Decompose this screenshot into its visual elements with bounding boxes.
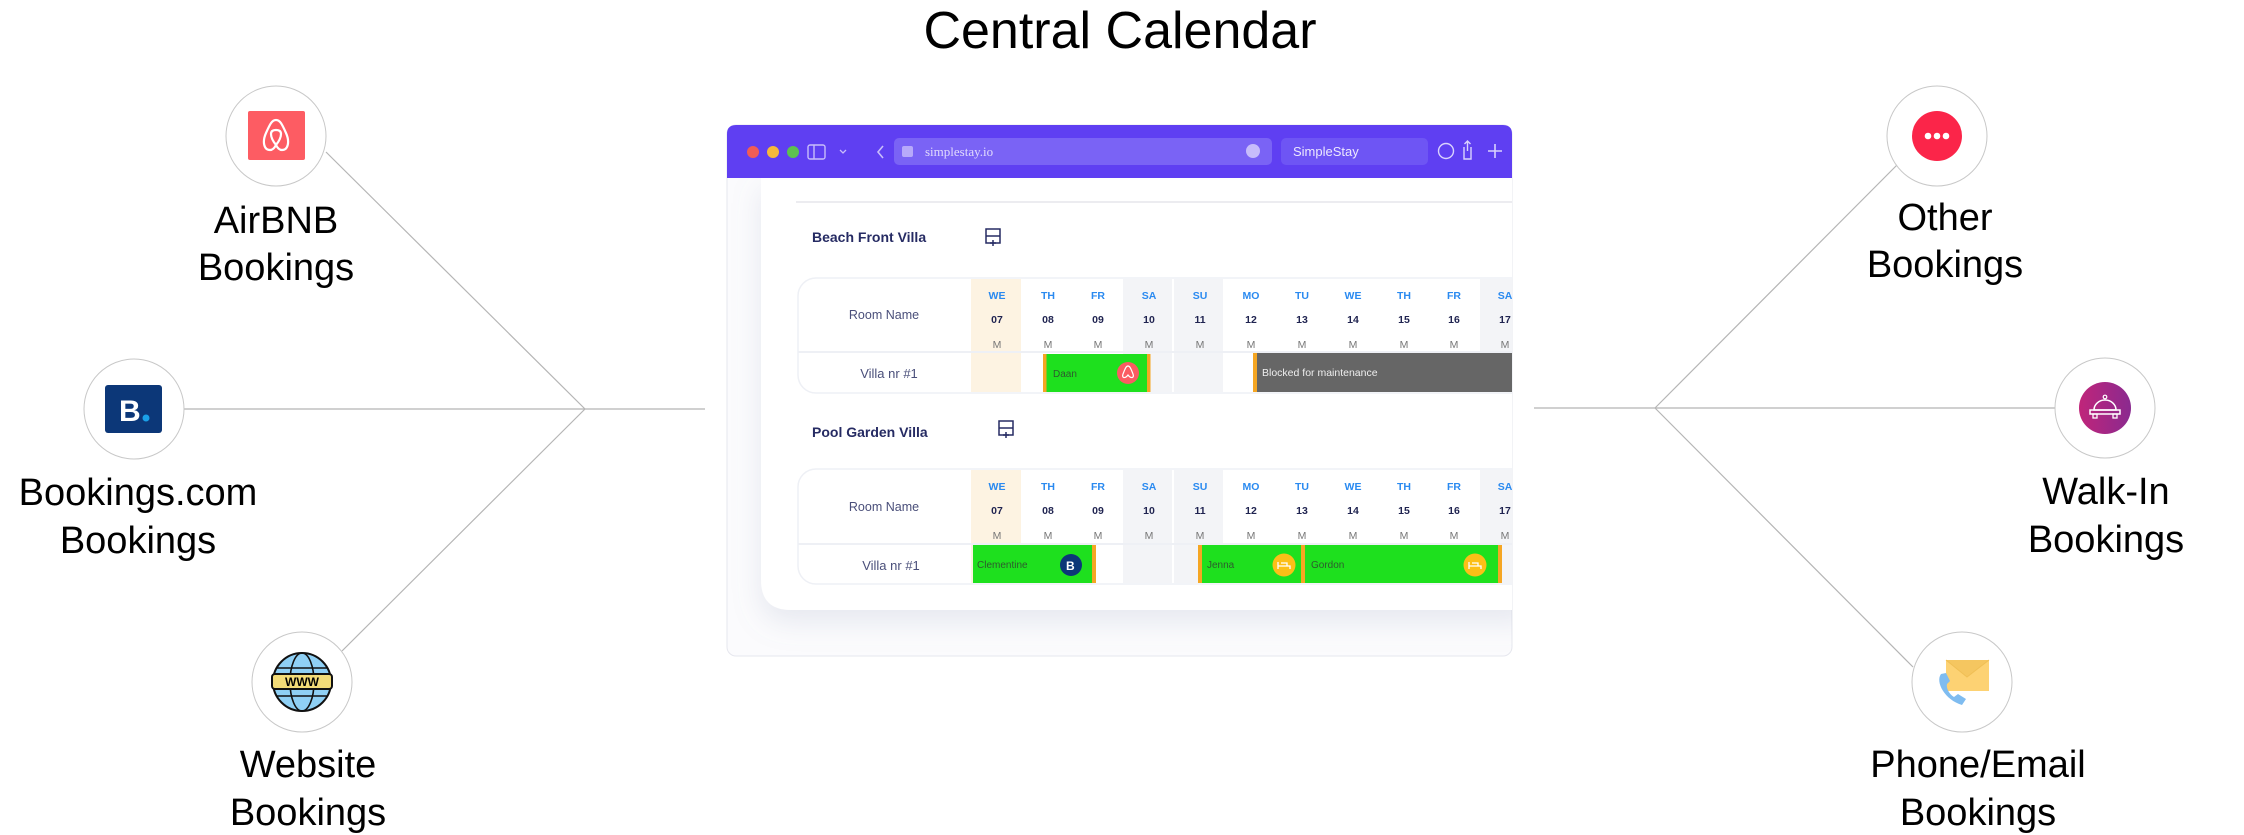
table 2: TH: [1041, 481, 1055, 493]
table 1: 09: [1092, 314, 1104, 326]
table 2: SU: [1193, 481, 1207, 493]
inner card: [761, 178, 1530, 610]
table 2: M: [1247, 530, 1255, 542]
table 1: M: [1501, 339, 1509, 351]
table 1: TU: [1295, 290, 1309, 302]
node: Walk-In: [2028, 358, 2184, 561]
table 1: MO: [1243, 290, 1259, 302]
table 2: M: [1298, 530, 1306, 542]
table 2: Villa nr #1: [862, 558, 920, 573]
booking bar: Gordon: [1301, 545, 1502, 583]
table 1: FR: [1447, 290, 1461, 302]
booking bar: Clementine: Clementine: [977, 560, 1028, 571]
booking bar: Jenna: Jenna: [1207, 560, 1235, 571]
table 1: FR: [1091, 290, 1105, 302]
table 2: WE: [1345, 481, 1361, 493]
node: AirBNB: [198, 86, 354, 289]
node: Booking.com: [19, 359, 257, 562]
node: Booking.com: Bookings.com: [19, 472, 257, 514]
table 1: WE: [1345, 290, 1361, 302]
table 1: 14: [1347, 314, 1359, 326]
table 2: WE: [989, 481, 1005, 493]
node: Phone/Email: Phone/Email: [1870, 744, 2086, 786]
table 1: TH: [1041, 290, 1055, 302]
table 1: WE: [989, 290, 1005, 302]
node: Other: Other: [1897, 197, 1993, 239]
table 1: Room Name: [849, 308, 919, 322]
icon: phone email: [1939, 660, 1989, 705]
booking bar: Clementine: B: [1066, 559, 1075, 573]
table 1: [798, 278, 1538, 393]
node: Phone/Email: Bookings: [1900, 792, 2056, 834]
connector lines right: [1534, 165, 2055, 667]
table 1: 12: [1245, 314, 1257, 326]
section: Pool Garden Villa: [812, 421, 1013, 440]
table 2: M: [1450, 530, 1458, 542]
table 1: 16: [1448, 314, 1460, 326]
icon: globe www: WWW: [285, 675, 320, 689]
booking bar: blocked: [1253, 353, 1533, 392]
table 2: M: [1400, 530, 1408, 542]
table 1: TH: [1397, 290, 1411, 302]
node: Website: Website: [240, 744, 376, 786]
node: Phone/Email: [1870, 632, 2086, 834]
icon: globe www: [272, 653, 332, 711]
panel: calendar window: [727, 125, 1538, 656]
table 2: 15: [1398, 505, 1410, 517]
section: Beach Front Villa: Beach Front Villa: [812, 229, 926, 245]
table 1: M: [1145, 339, 1153, 351]
section: Beach Front Villa: [812, 229, 1000, 246]
table 1: M: [1094, 339, 1102, 351]
node: Website: [230, 632, 386, 834]
table 2: FR: [1091, 481, 1105, 493]
table 1: SA: [1498, 290, 1513, 302]
table 2: M: [1044, 530, 1052, 542]
node: Booking.com: Bookings: [60, 520, 216, 562]
table 2: 16: [1448, 505, 1460, 517]
table 2: TU: [1295, 481, 1309, 493]
node: Other: [1867, 86, 2023, 286]
icon: dots: [1912, 111, 1962, 161]
table 1: M: [1044, 339, 1052, 351]
table 1: M: [1247, 339, 1255, 351]
table 1: SU: [1193, 290, 1207, 302]
table 2: 17: [1499, 505, 1511, 517]
table 2: 12: [1245, 505, 1257, 517]
table 2: 13: [1296, 505, 1308, 517]
table 2: SA: [1498, 481, 1513, 493]
table 1: 08: [1042, 314, 1054, 326]
node: Other: Bookings: [1867, 244, 2023, 286]
connector lines left: [184, 152, 705, 651]
icon: booking: [105, 385, 162, 433]
node: Website: Bookings: [230, 792, 386, 834]
section: Pool Garden Villa: Pool Garden Villa: [812, 424, 928, 440]
table 1: M: [993, 339, 1001, 351]
node: AirBNB: AirBNB: [214, 200, 338, 242]
table 2: M: [1094, 530, 1102, 542]
node: AirBNB: Bookings: [198, 247, 354, 289]
table 2: 10: [1143, 505, 1155, 517]
table 2: 07: [991, 505, 1003, 517]
node: Walk-In: Walk-In: [2042, 471, 2170, 513]
booking bar: blocked: Blocked for maintenance: [1262, 367, 1378, 379]
table 1: SA: [1142, 290, 1157, 302]
table 2: FR: [1447, 481, 1461, 493]
table 1: M: [1349, 339, 1357, 351]
table 2: SA: [1142, 481, 1157, 493]
node: Walk-In: Bookings: [2028, 519, 2184, 561]
icon: booking: B: [119, 395, 141, 428]
booking bar: Daan: [1043, 354, 1150, 392]
table 1: 10: [1143, 314, 1155, 326]
table 2: [798, 469, 1538, 584]
table 1: 15: [1398, 314, 1410, 326]
table 2: M: [1501, 530, 1509, 542]
booking bar: Gordon: Gordon: [1311, 560, 1344, 571]
table 2: 11: [1194, 505, 1206, 517]
table 2: 09: [1092, 505, 1104, 517]
table 2: M: [1349, 530, 1357, 542]
table 2: M: [1145, 530, 1153, 542]
booking bar: Clementine: [973, 545, 1096, 583]
booking bar: Jenna: [1198, 545, 1303, 583]
table 2: Room Name: [849, 500, 919, 514]
table 1: 11: [1194, 314, 1206, 326]
table 1: 07: [991, 314, 1003, 326]
table 1: M: [1196, 339, 1204, 351]
table 2: M: [993, 530, 1001, 542]
table 1: 13: [1296, 314, 1308, 326]
table 1: Villa nr #1: [860, 366, 918, 381]
browser toolbar: simplestay.io: [925, 144, 993, 159]
table 1: M: [1450, 339, 1458, 351]
table 1: M: [1298, 339, 1306, 351]
icon: bell: [2079, 382, 2131, 434]
table 2: TH: [1397, 481, 1411, 493]
table 2: MO: [1243, 481, 1259, 493]
icon: airbnb: [248, 111, 305, 160]
table 1: M: [1400, 339, 1408, 351]
title: Central Calendar: [923, 2, 1317, 60]
table 2: M: [1196, 530, 1204, 542]
browser toolbar: SimpleStay: [1293, 144, 1359, 159]
browser toolbar: [727, 125, 1512, 178]
table 2: 08: [1042, 505, 1054, 517]
table 2: 14: [1347, 505, 1359, 517]
booking bar: Daan: Daan: [1053, 369, 1077, 380]
table 1: 17: [1499, 314, 1511, 326]
